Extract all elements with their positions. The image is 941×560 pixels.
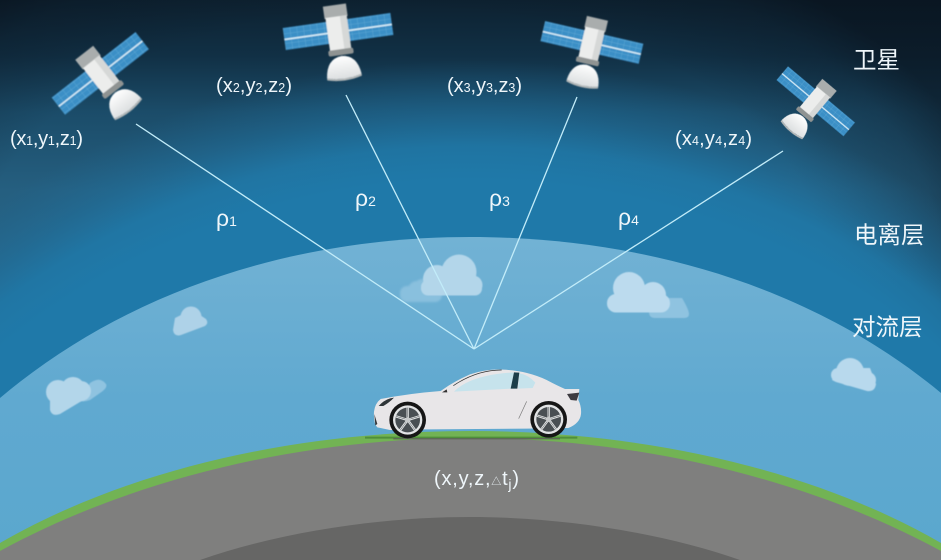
coordinate label: satellite 2: (x2,y2,z2) xyxy=(216,75,292,97)
car: door line xyxy=(519,401,527,419)
range label rho 4: ρ4 xyxy=(618,204,639,230)
car: rear wheel xyxy=(530,401,567,438)
car: body xyxy=(374,370,581,430)
range label rho 1: ρ1 xyxy=(216,205,237,231)
clouds xyxy=(46,254,876,415)
car: mirror xyxy=(442,389,447,392)
cloud: left faded xyxy=(80,380,106,401)
cloud: center faded xyxy=(400,279,442,302)
ground: green surface band xyxy=(0,431,941,560)
receiver coordinate label: (x,y,z,△t xyxy=(434,468,508,490)
car: front wheel xyxy=(389,402,426,438)
cloud: right center faded xyxy=(649,298,689,318)
coordinate label: satellite 3: (x3,y3,z3) xyxy=(447,75,522,97)
cloud: left main xyxy=(46,377,91,415)
range label rho 3: ρ3 xyxy=(489,185,510,211)
ground: grey earth layer xyxy=(0,438,941,560)
car: ground shadow xyxy=(365,435,577,441)
coordinate label: satellite 4: (x4,y4,z4) xyxy=(675,128,752,150)
cloud: right center xyxy=(607,272,689,318)
car: window pillar xyxy=(511,372,519,389)
cloud: far right xyxy=(831,358,876,391)
cloud: left xyxy=(46,377,106,415)
cloud: center xyxy=(400,254,482,302)
car: windows xyxy=(454,372,535,392)
satellite 1 xyxy=(42,20,172,144)
cloud: small left xyxy=(173,306,207,335)
satellite 4 xyxy=(757,57,863,160)
layer label: satellites: 卫星 xyxy=(853,47,900,73)
signal lines from satellites to receiver xyxy=(136,95,783,349)
troposphere dome xyxy=(0,237,941,560)
range label rho 2: ρ2 xyxy=(355,185,376,211)
car: roof edge xyxy=(453,370,502,386)
satellite 2 xyxy=(281,0,399,88)
receiver coordinate label: j xyxy=(507,476,512,492)
receiver coordinate label: ) xyxy=(512,468,519,490)
car: headlight xyxy=(379,398,394,406)
car: tail light xyxy=(567,393,579,401)
ground: dark inner layer xyxy=(200,517,740,560)
car xyxy=(365,370,581,439)
cloud: right center main xyxy=(607,272,670,312)
satellite 3 xyxy=(532,7,647,98)
car: front grille xyxy=(374,414,377,425)
layer label: ionosphere: 电离层 xyxy=(854,222,924,248)
layer label: troposphere: 对流层 xyxy=(852,314,922,340)
coordinate label: satellite 1: (x1,y1,z1) xyxy=(10,128,83,150)
cloud: center main xyxy=(421,254,482,296)
